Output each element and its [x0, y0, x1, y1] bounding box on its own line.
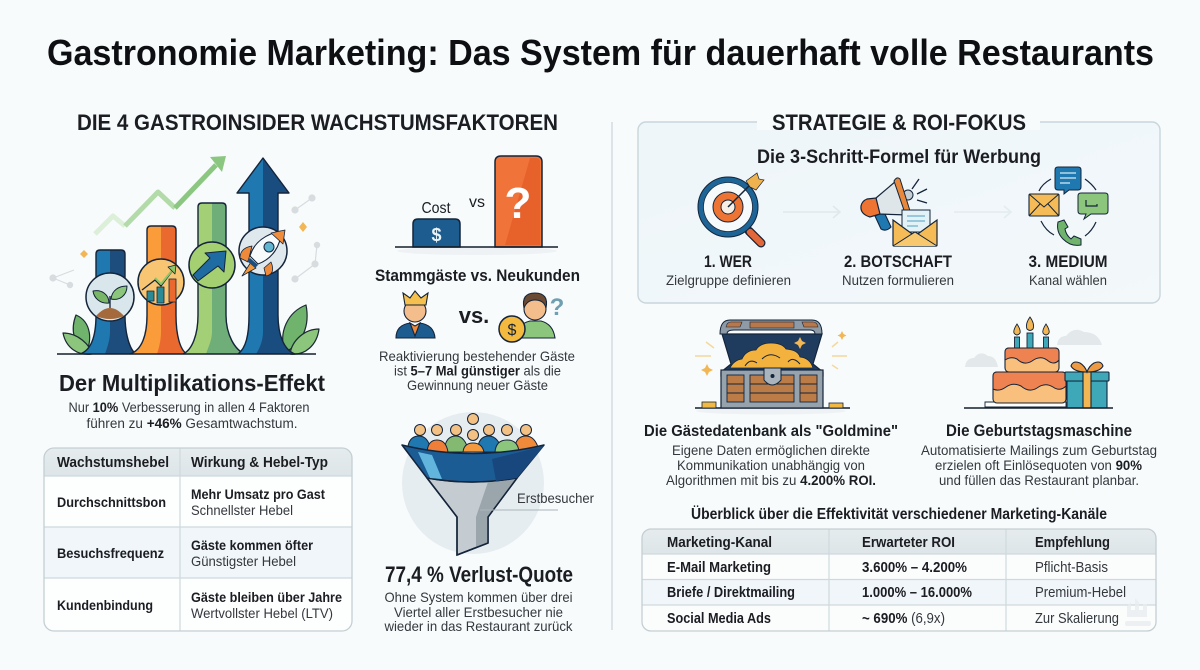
heading: 3-Schritt-Formel: Die 3-Schritt-Formel für Werbung: [757, 146, 1041, 168]
step 3 labels: Kanal wählen: [1029, 272, 1107, 288]
row: Social Media Ads: Zur Skalierung: [1035, 611, 1119, 627]
funnel lower grey: [427, 478, 517, 555]
chart: growth bars: [50, 156, 320, 354]
text: Verlust-Quote: Viertel aller Erstbesucher nie: [394, 604, 563, 620]
table: Marketing-Kanäle: [642, 529, 1156, 631]
icon: rocket: [239, 227, 287, 276]
icon: orange mini chart: [138, 259, 184, 305]
heading: Wachstumsfaktoren: DIE 4 GASTROINSIDER WACHSTUMSFAKTOREN: [77, 110, 558, 135]
step 2 labels: 2. BOTSCHAFT: [844, 253, 952, 271]
icon: birthday cake and gift: [964, 317, 1113, 408]
step 2 labels: [842, 253, 954, 288]
text: Verlust-Quote: wieder in das Restaurant zurück: [384, 618, 573, 634]
people in funnel: [408, 414, 539, 452]
row: Durchschnittsbon: [57, 486, 325, 518]
panel: Strategie: [638, 110, 1160, 303]
heading: Geburtstagsmaschine: Die Geburtstagsmaschine: [946, 422, 1132, 440]
row: Besuchsfrequenz: Gäste kommen öfter: [191, 537, 313, 553]
row: E-Mail Marketing: Pflicht-Basis: [1035, 560, 1108, 576]
sparkle stars: [701, 331, 846, 376]
heading: Goldmine: Die Gästedatenbank als "Goldmine": [644, 423, 898, 440]
bar 3: green: [183, 203, 245, 354]
step 1 labels: [666, 253, 791, 288]
cost bar: $: [431, 225, 442, 245]
row: Durchschnittsbon: Mehr Umsatz pro Gast: [191, 486, 325, 502]
icon: new guest with coin: ?: [550, 294, 564, 321]
text: Reaktivierung: Gewinnung neuer Gäste: [407, 377, 548, 393]
icon: new guest with coin: $: [508, 322, 517, 339]
step 1 labels: Zielgruppe definieren: [666, 272, 791, 288]
cake tiers: [1005, 348, 1059, 372]
text: Verlust-Quote: [384, 589, 573, 634]
bar 1: blue: [80, 250, 136, 354]
icon: sparkles: [80, 222, 307, 258]
text: Geburtstagsmaschine: Automatisierte Mailings zum Geburtstag: [921, 442, 1157, 458]
row: Briefe / Direktmailing: Briefe / Direktmailing: [667, 585, 795, 601]
row: E-Mail Marketing: [667, 560, 1108, 576]
row: Briefe / Direktmailing: 1.000% – 16.000%: [862, 585, 972, 601]
step 3 labels: [1028, 253, 1108, 288]
row: Besuchsfrequenz: Besuchsfrequenz: [57, 545, 164, 561]
icon: rising arrow: [95, 156, 226, 234]
table header row: Erwarteter ROI: [862, 534, 955, 551]
icon: communication channels: [1029, 167, 1108, 245]
text: Reaktivierung: Reaktivierung bestehender Gäste: [379, 348, 575, 364]
text: Geburtstagsmaschine: und füllen das Restaurant planbar.: [939, 472, 1139, 488]
heading: Verlust-Quote: 77,4 % Verlust-Quote: [385, 562, 573, 587]
icon: treasure chest: [695, 320, 850, 414]
heading: Strategie: STRATEGIE & ROI-FOKUS: [772, 110, 1026, 135]
row: E-Mail Marketing: E-Mail Marketing: [667, 560, 771, 576]
label: Erstbesucher: [480, 490, 594, 510]
text: Multiplikation: [68, 400, 310, 431]
unknown cost bar: [495, 156, 542, 247]
clouds: [965, 330, 1102, 367]
table header row: Empfehlung: [1035, 534, 1110, 551]
cost bar: [413, 219, 460, 247]
row: E-Mail Marketing: 3.600% – 4.200%: [862, 560, 967, 576]
arrow: step 2 to 3: [954, 206, 1011, 218]
table header row: Wachstumshebel: [57, 454, 169, 471]
row: Besuchsfrequenz: [57, 537, 313, 569]
table header row: Wirkung & Hebel-Typ: [191, 454, 328, 471]
funnel blue rim: [402, 445, 544, 482]
row: Briefe / Direktmailing: [667, 585, 1126, 601]
row: Durchschnittsbon: Schnellster Hebel: [191, 502, 293, 518]
label: vs: vs: [469, 194, 485, 211]
text: Reaktivierung: [379, 348, 575, 393]
step 2 labels: Nutzen formulieren: [842, 272, 954, 288]
bar 4: blue arrow: [237, 158, 295, 354]
step 1 labels: 1. WER: [704, 253, 752, 271]
icon: funnel: [402, 412, 594, 555]
icon: right leaves: [283, 305, 319, 354]
step 3 labels: 3. MEDIUM: [1028, 253, 1108, 271]
icon: green circle arrow: [189, 242, 235, 288]
text: Reaktivierung: ist 5–7 Mal günstiger als die: [394, 362, 561, 378]
table header row: Marketing-Kanal: [667, 534, 772, 551]
icon: megaphone and letter: [861, 178, 937, 246]
icon: left leaves: [63, 315, 92, 354]
text: Goldmine: Kommunikation unabhängig von: [677, 457, 865, 473]
row: Durchschnittsbon: Durchschnittsbon: [57, 494, 166, 510]
table: Wachstumshebel: [44, 448, 352, 631]
row: Social Media Ads: ~ 690% (6,9x): [862, 611, 945, 627]
title: Gastronomie Marketing: Das System für dauerhaft volle Restaurants: [47, 32, 1154, 73]
table header row: [57, 454, 328, 471]
text: Multiplikation: Nur 10% Verbesserung in allen 4 Faktoren: [68, 400, 310, 415]
row: Kundenbindung: Wertvollster Hebel (LTV): [191, 605, 333, 621]
row: Kundenbindung: Gäste bleiben über Jahre: [191, 589, 342, 605]
chart: cost comparison: [395, 156, 558, 255]
arrow: step 1 to 2: [783, 206, 840, 218]
heading: Kanal-Überblick: Überblick über die Effektivität verschiedener Marketing-Kanäle: [691, 506, 1107, 523]
text: Geburtstagsmaschine: [921, 442, 1157, 488]
row: Briefe / Direktmailing: Premium-Hebel: [1035, 585, 1126, 601]
label: Cost: Cost: [422, 200, 451, 217]
icon: new guest with coin: [499, 293, 564, 342]
heading: Stammgäste vs. Neukunden: Stammgäste vs. Neukunden: [375, 266, 580, 285]
text: Goldmine: Algorithmen mit bis zu 4.200% ROI.: [666, 472, 876, 488]
shine rays: [695, 342, 847, 369]
row: Kundenbindung: [57, 589, 342, 621]
heading: Multiplikations-Effekt: Der Multiplikations-Effekt: [59, 370, 325, 396]
text: Multiplikation: führen zu +46% Gesamtwachstum.: [86, 416, 297, 431]
gift box: [1065, 362, 1109, 408]
label: Erstbesucher: Erstbesucher: [517, 490, 594, 506]
row: Social Media Ads: Social Media Ads: [667, 611, 771, 627]
icon: king guest: [396, 291, 435, 338]
row: Besuchsfrequenz: Günstigster Hebel: [191, 553, 296, 569]
icon: target: [698, 173, 764, 243]
icon: seedling: [86, 273, 134, 321]
icon: network dots: [50, 195, 320, 288]
text: Geburtstagsmaschine: erzielen oft Einlösequoten von 90%: [935, 457, 1143, 473]
table header row: [667, 534, 1110, 551]
watermark: [1125, 598, 1151, 626]
text: Goldmine: Eigene Daten ermöglichen direkte: [672, 442, 870, 458]
row: Kundenbindung: Kundenbindung: [57, 597, 153, 613]
row: Social Media Ads: [667, 611, 1119, 627]
gold bars: [702, 402, 843, 408]
text: Verlust-Quote: Ohne System kommen über drei: [384, 589, 572, 605]
unknown cost bar: ?: [505, 179, 531, 228]
bar 2: orange: [130, 226, 187, 354]
label: vs.: vs.: [459, 303, 489, 328]
text: Goldmine: [666, 442, 876, 488]
candles: [1014, 317, 1049, 348]
